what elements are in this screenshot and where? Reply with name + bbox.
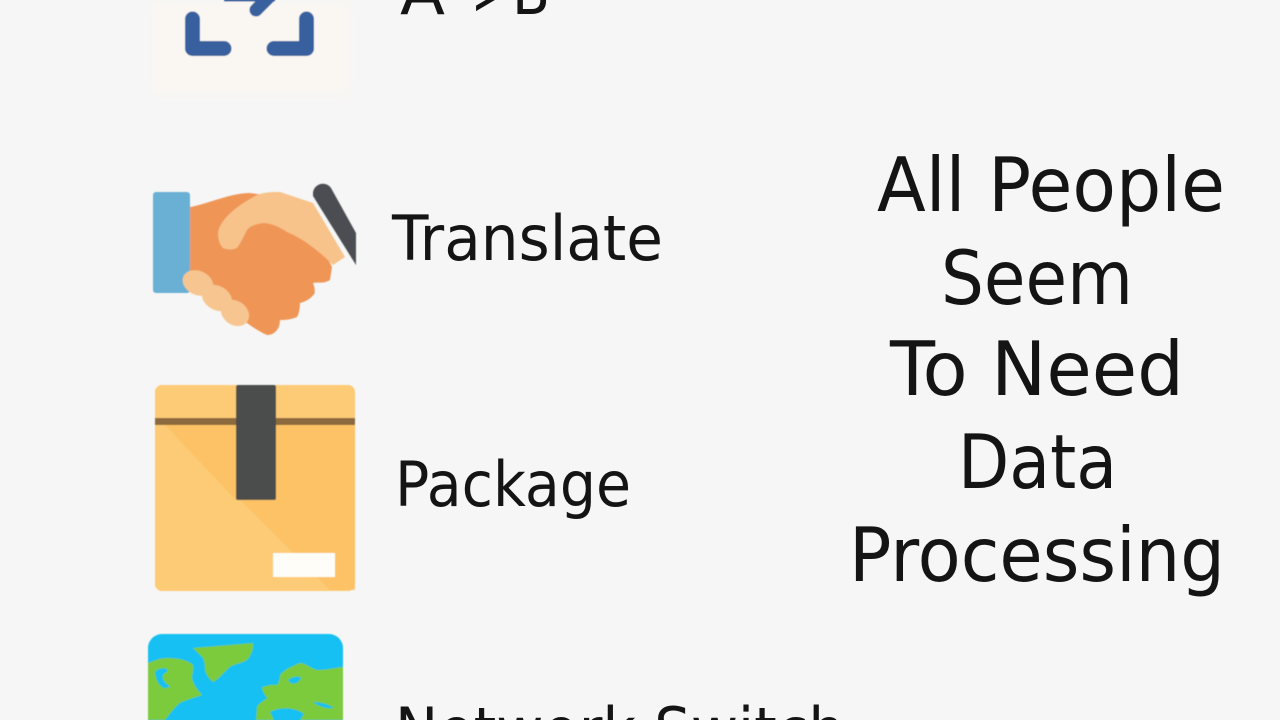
icon: package box <box>155 385 355 591</box>
icon: world map <box>148 634 343 720</box>
heading: All People Seem To Need Data Processing <box>849 141 1225 599</box>
heading: All People Seem To Need Data Processing: Data <box>958 418 1117 506</box>
label: A to B <box>400 0 550 29</box>
heading: All People Seem To Need Data Processing: All People <box>877 141 1225 229</box>
heading: All People Seem To Need Data Processing: To Need <box>889 325 1184 413</box>
label: Translate: Translate <box>391 202 663 275</box>
icon: handshake <box>153 184 356 335</box>
heading: All People Seem To Need Data Processing: Processing <box>849 511 1225 599</box>
label: Package: Package <box>395 448 631 521</box>
heading: All People Seem To Need Data Processing: Seem <box>941 234 1133 322</box>
icon: transform arrow in brackets <box>150 0 350 96</box>
